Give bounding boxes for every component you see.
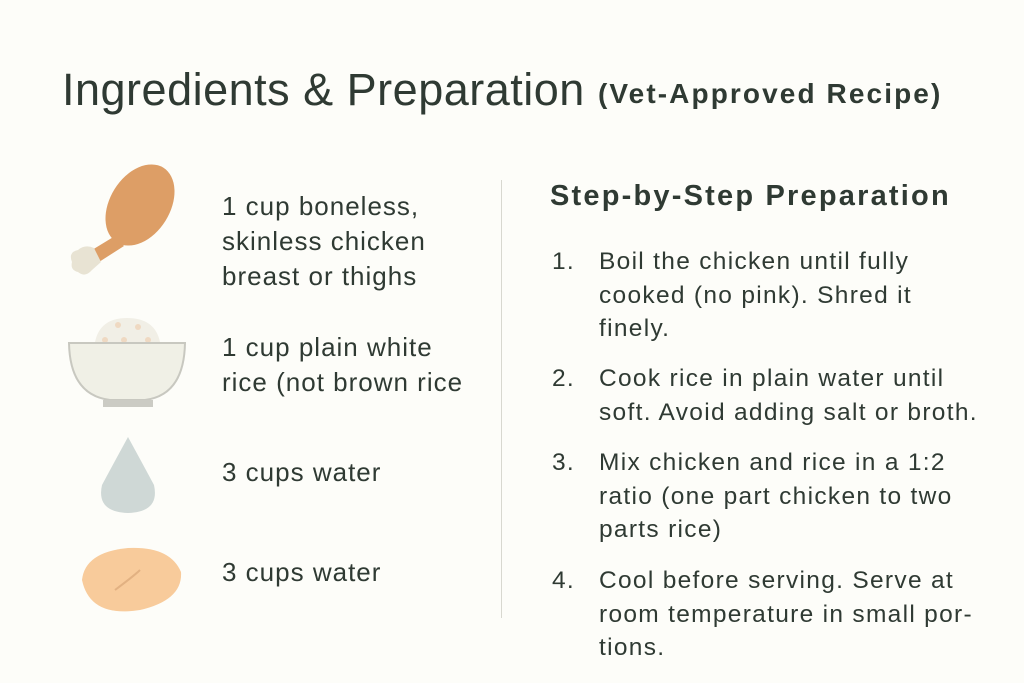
- icons: [68, 164, 186, 612]
- icon: rice bowl: [69, 318, 185, 407]
- ingredient 4: 3 cups water: [222, 557, 381, 587]
- ingredient 2: [222, 332, 463, 397]
- step 2: Cook rice in plain water until: [599, 365, 944, 392]
- step 3: ratio (one part chicken to two: [599, 482, 953, 510]
- step 2: soft. Avoid adding salt or broth.: [599, 398, 978, 426]
- title: Ingredients & Preparation: [62, 64, 585, 115]
- step 2: [552, 365, 978, 426]
- ingredient 1: [222, 191, 426, 291]
- heading: steps: Step-by-Step Preparation: [550, 180, 951, 212]
- step 1: finely.: [599, 315, 670, 342]
- step 3: Mix chicken and rice in a 1:2: [599, 449, 946, 476]
- icon: bread roll: [82, 548, 181, 611]
- icon: chicken drumstick: [71, 152, 189, 275]
- step 4: tions.: [599, 634, 665, 661]
- step 4: 4.: [552, 567, 575, 594]
- step 1: [552, 248, 912, 342]
- ingredient 2: 1 cup plain white: [222, 332, 433, 362]
- step 4: room temperature in small por-: [599, 600, 973, 628]
- step 1: Boil the chicken until fully: [599, 248, 909, 275]
- ingredient 1: breast or thighs: [222, 261, 417, 291]
- step 4: [552, 567, 973, 661]
- ingredient 1: skinless chicken: [222, 226, 426, 256]
- icon: water drop: [101, 437, 155, 513]
- ingredient 1: 1 cup boneless,: [222, 191, 419, 221]
- step 1: 1.: [552, 248, 575, 275]
- subtitle: (Vet-Approved Recipe): [598, 78, 942, 109]
- step 3: 3.: [552, 449, 575, 476]
- ingredient 2: rice (not brown rice: [222, 367, 463, 397]
- step 1: cooked (no pink). Shred it: [599, 282, 912, 308]
- step 3: parts rice): [599, 516, 722, 543]
- step 4: Cool before serving. Serve at: [599, 567, 954, 594]
- ingredient 3: 3 cups water: [222, 457, 381, 487]
- step 2: 2.: [552, 365, 575, 392]
- step 3: [552, 449, 953, 543]
